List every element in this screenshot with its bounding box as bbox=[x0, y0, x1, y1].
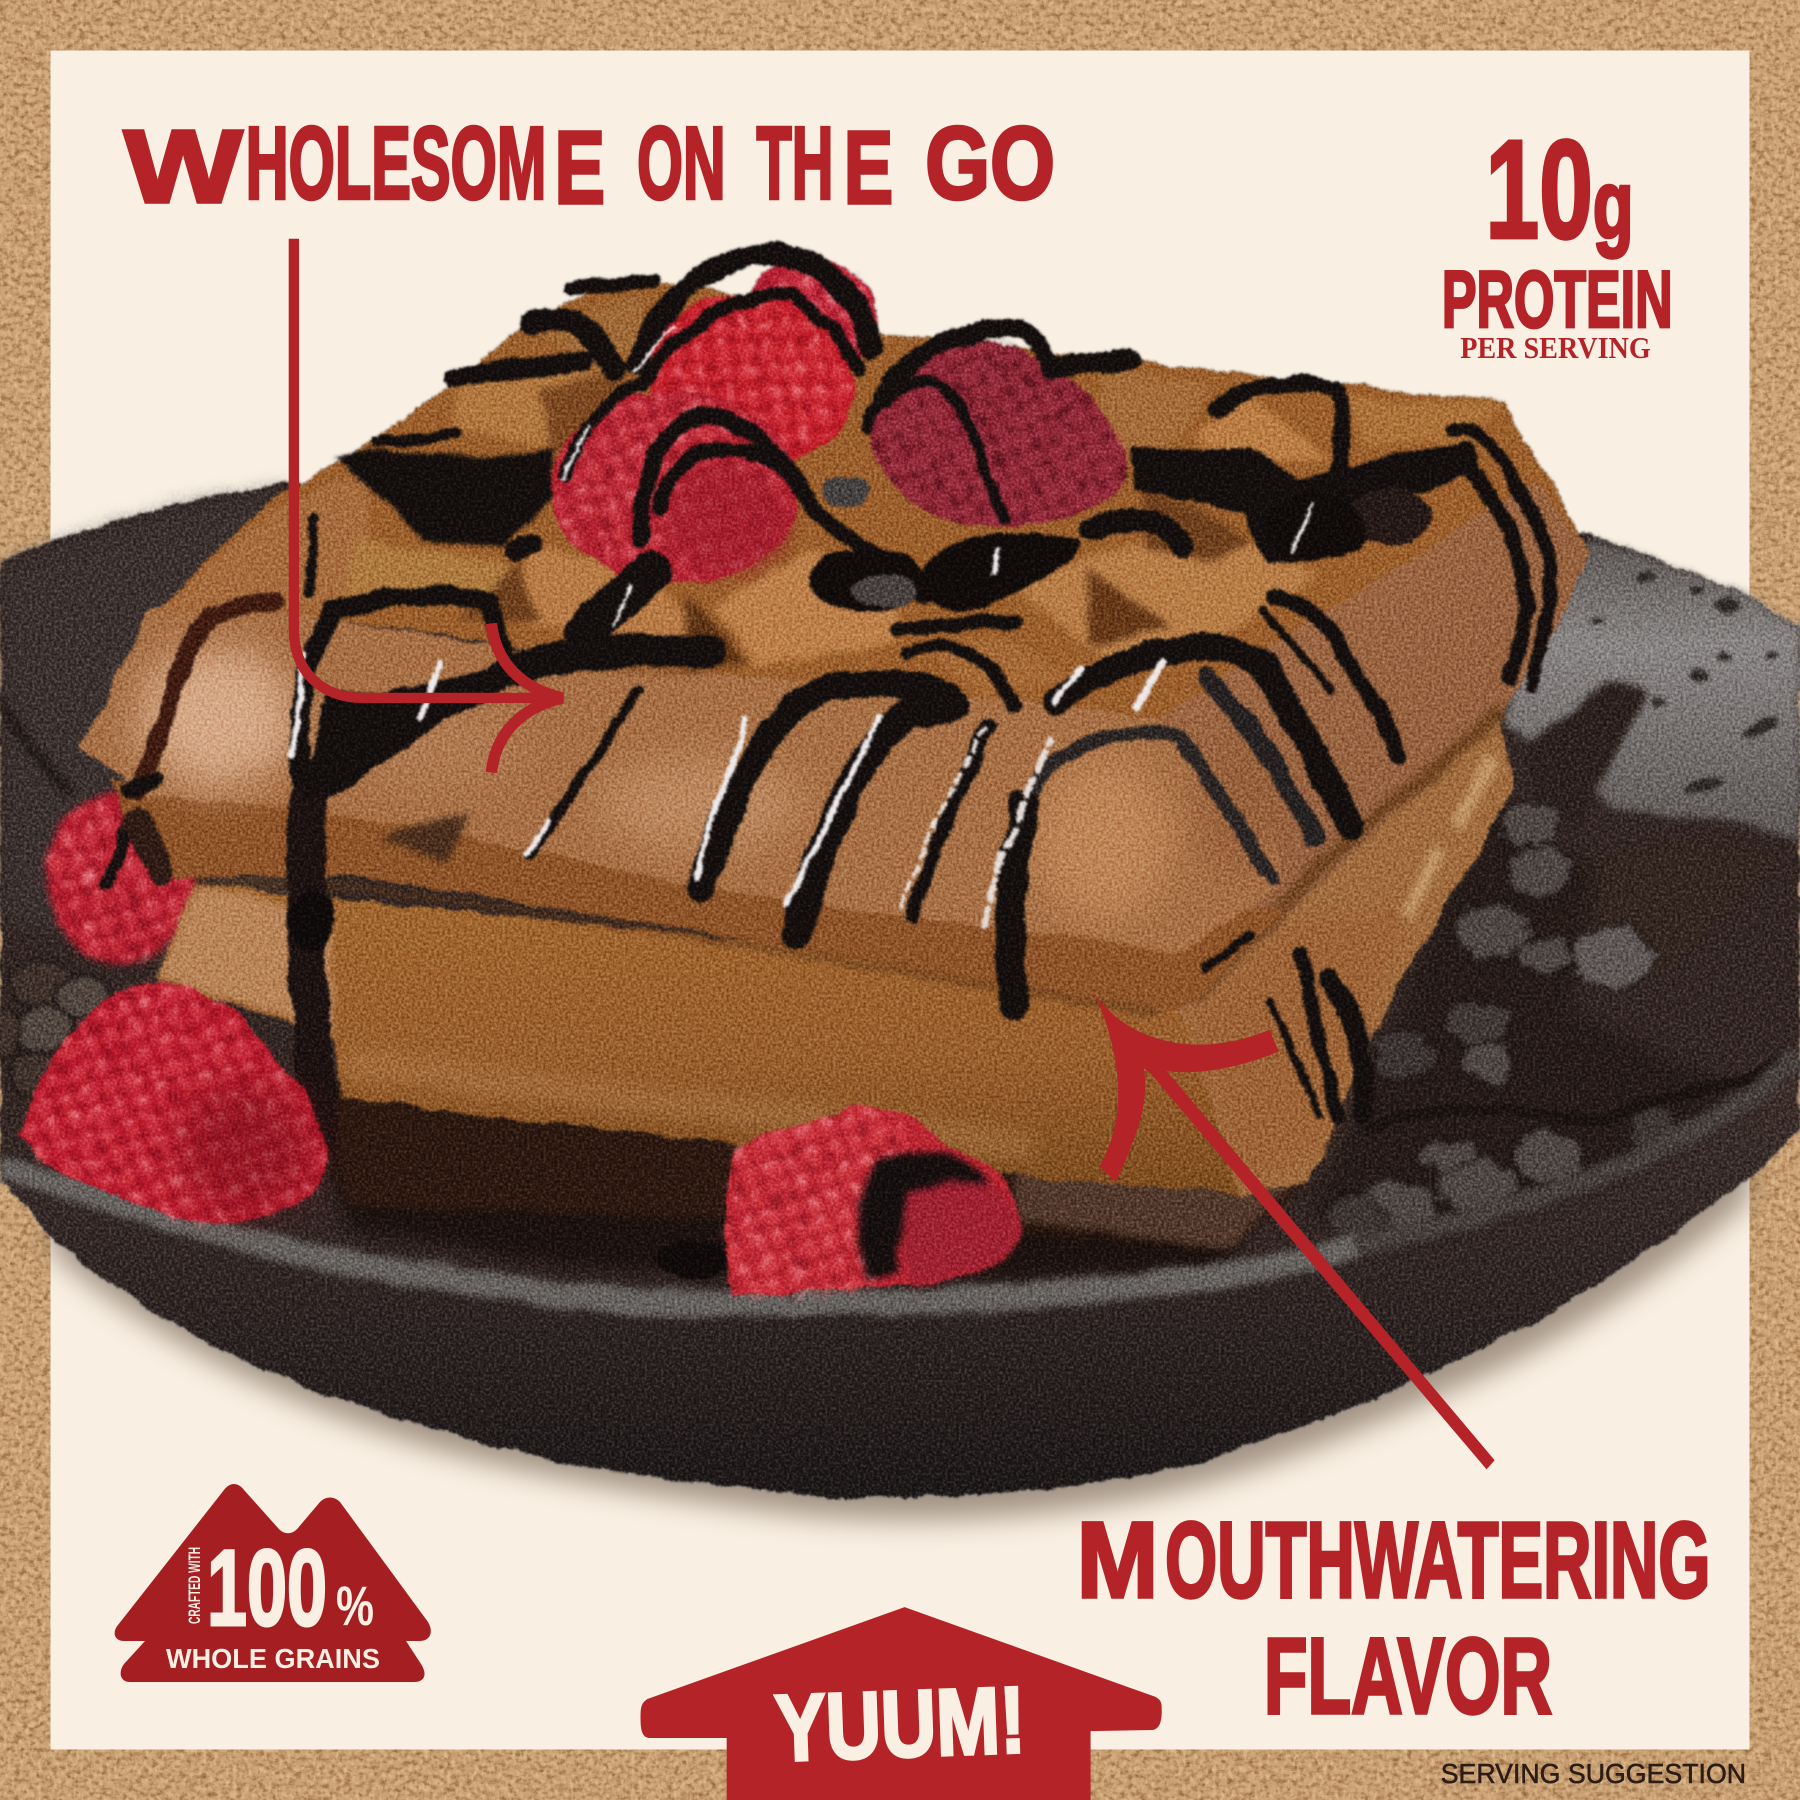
photo: waffles on a plate bbox=[0, 236, 1800, 1498]
raspberry left behind bbox=[46, 792, 195, 964]
chocolate sheet bbox=[1538, 838, 1782, 976]
lower waffle right highlight bbox=[1406, 758, 1492, 918]
front crumb patches bbox=[379, 813, 471, 861]
title: wholesome on the go bbox=[124, 105, 1055, 225]
sauce pools bbox=[809, 475, 1433, 612]
title HOLESOM: HOLESOM bbox=[246, 105, 546, 221]
arrow shape bbox=[641, 1607, 1162, 1800]
title E second: E bbox=[844, 109, 893, 225]
yuum text: YUUM! bbox=[773, 1667, 1027, 1781]
plate interior bbox=[0, 482, 1800, 1299]
line one M: M bbox=[1077, 1499, 1158, 1620]
protein label: PROTEIN bbox=[1442, 255, 1673, 345]
sauce highlights bbox=[293, 327, 1314, 924]
raspberry bottom center bbox=[725, 1107, 1019, 1297]
badge 100: 100 bbox=[207, 1527, 327, 1648]
sauce back edge bbox=[379, 434, 453, 442]
plate left shading bbox=[0, 488, 287, 953]
sauce on left raspberry bbox=[106, 829, 129, 884]
badge percent: % bbox=[336, 1574, 374, 1637]
protein callout bbox=[1442, 111, 1673, 365]
badge: 100% whole grains bbox=[115, 1484, 431, 1682]
plate rim right bbox=[1359, 1056, 1800, 1244]
badge crafted with: CRAFTED WITH bbox=[185, 1547, 204, 1624]
lower waffle crumb bands bbox=[344, 1062, 1033, 1148]
front face lights bbox=[138, 649, 1279, 918]
arrow: mouthwatering flavor bbox=[1095, 994, 1495, 1469]
sauce web, front left bbox=[301, 677, 482, 804]
raspberry front bbox=[551, 391, 799, 584]
title E: E bbox=[554, 109, 605, 225]
chocolate chips left bbox=[0, 960, 110, 1097]
arrow badge: yuum bbox=[641, 1607, 1162, 1800]
chocolate sauce drizzles, top bbox=[310, 253, 1550, 686]
lower waffle end shading bbox=[1016, 1171, 1297, 1249]
waffle seam bbox=[195, 882, 1159, 1016]
lower waffle right shade bbox=[1188, 907, 1412, 1188]
title GO: GO bbox=[925, 105, 1055, 221]
protein amount: 10g bbox=[1485, 111, 1634, 268]
line two: FLAVOR bbox=[1264, 1615, 1552, 1736]
plate rim bbox=[0, 1169, 1359, 1304]
per serving label: PER SERVING bbox=[1460, 330, 1651, 365]
headline: mouthwatering flavor bbox=[1077, 1499, 1710, 1736]
lower waffle right side bbox=[1182, 717, 1513, 1194]
serving suggestion note: SERVING SUGGESTION bbox=[1441, 1758, 1746, 1789]
title TH: TH bbox=[757, 105, 833, 221]
sauce pool by raspberry bbox=[654, 1240, 728, 1281]
plate bbox=[0, 482, 1800, 1498]
sauce in left pocket bbox=[335, 448, 553, 546]
upper waffle front face bbox=[78, 603, 1286, 953]
dark plate pool bbox=[321, 1125, 1240, 1283]
lower waffle left corner bbox=[158, 886, 333, 1033]
chocolate shard bbox=[1527, 680, 1648, 831]
raspberry front left bbox=[21, 981, 328, 1223]
arrow: wholesome on the go bbox=[294, 239, 562, 773]
sauce drip blob bbox=[288, 891, 334, 951]
raspberry right bbox=[872, 340, 1125, 526]
badge shape bbox=[115, 1484, 431, 1682]
upper waffle lip bbox=[109, 781, 1286, 1015]
plate shadow bbox=[51, 1148, 1749, 1520]
chocolate sauce drizzles, front bbox=[126, 595, 1401, 1131]
lower waffle underside bbox=[331, 1085, 1309, 1249]
chocolate chips right bbox=[1325, 801, 1676, 1240]
speckled grey plate area bbox=[1504, 537, 1800, 844]
plate swirl bbox=[0, 700, 69, 792]
sauce on bottom raspberry bbox=[855, 1153, 990, 1280]
dark ground under chips bbox=[1309, 804, 1756, 1240]
lower waffle front face bbox=[157, 884, 1378, 1194]
merged sauce, top right bbox=[1127, 441, 1479, 565]
badge whole grains: WHOLE GRAINS bbox=[166, 1643, 380, 1674]
raspberry middle bbox=[631, 272, 873, 485]
upper waffle top face bbox=[143, 281, 1590, 735]
waffle grid pockets bbox=[155, 293, 1504, 700]
chocolate drizzle on plate bbox=[1366, 1062, 1779, 1131]
plate specks bbox=[1589, 572, 1783, 797]
raspberry back bbox=[728, 236, 897, 396]
title W: W bbox=[124, 108, 243, 224]
upper waffle right lower edge bbox=[1194, 709, 1504, 999]
upper waffle right side bbox=[1159, 482, 1590, 1013]
title ON: ON bbox=[637, 105, 726, 221]
